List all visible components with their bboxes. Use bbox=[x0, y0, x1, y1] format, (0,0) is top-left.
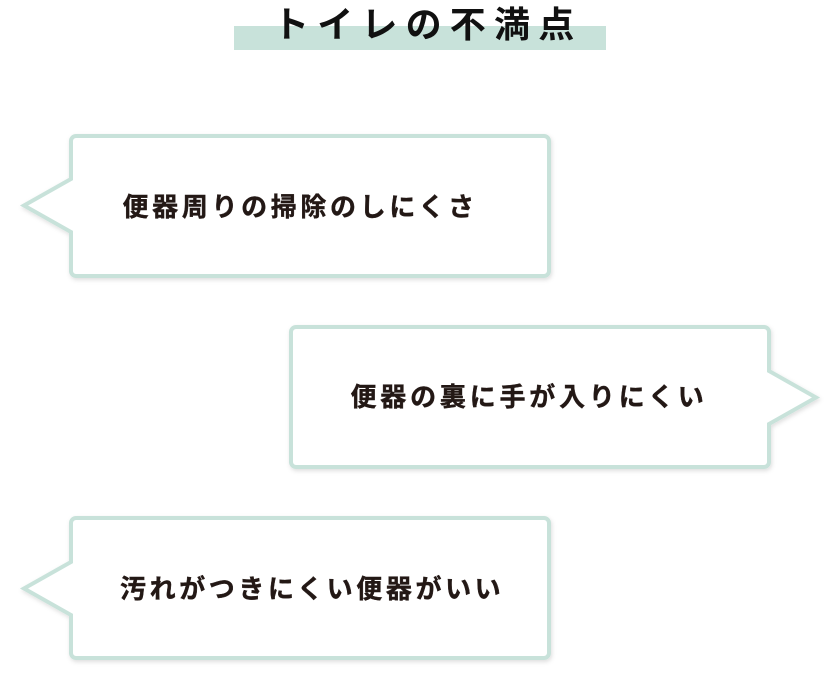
speech bubble: hard to reach behind the toilet bbox=[291, 327, 816, 467]
speech bubble: prefers a stain-resistant toilet bbox=[24, 518, 549, 658]
bubble outline bbox=[24, 136, 549, 276]
title bbox=[234, 4, 606, 50]
bubble outline bbox=[291, 327, 816, 467]
bubble text: 便器の裏に手が入りにくい bbox=[350, 382, 708, 412]
title highlight band bbox=[234, 26, 606, 50]
bubble outline bbox=[24, 518, 549, 658]
speech bubble: cleaning around the toilet bbox=[24, 136, 549, 276]
bubble text: 便器周りの掃除のしにくさ bbox=[122, 192, 478, 222]
title text: トイレの不満点 bbox=[273, 4, 582, 45]
bubble text: 汚れがつきにくい便器がいい bbox=[120, 574, 504, 604]
